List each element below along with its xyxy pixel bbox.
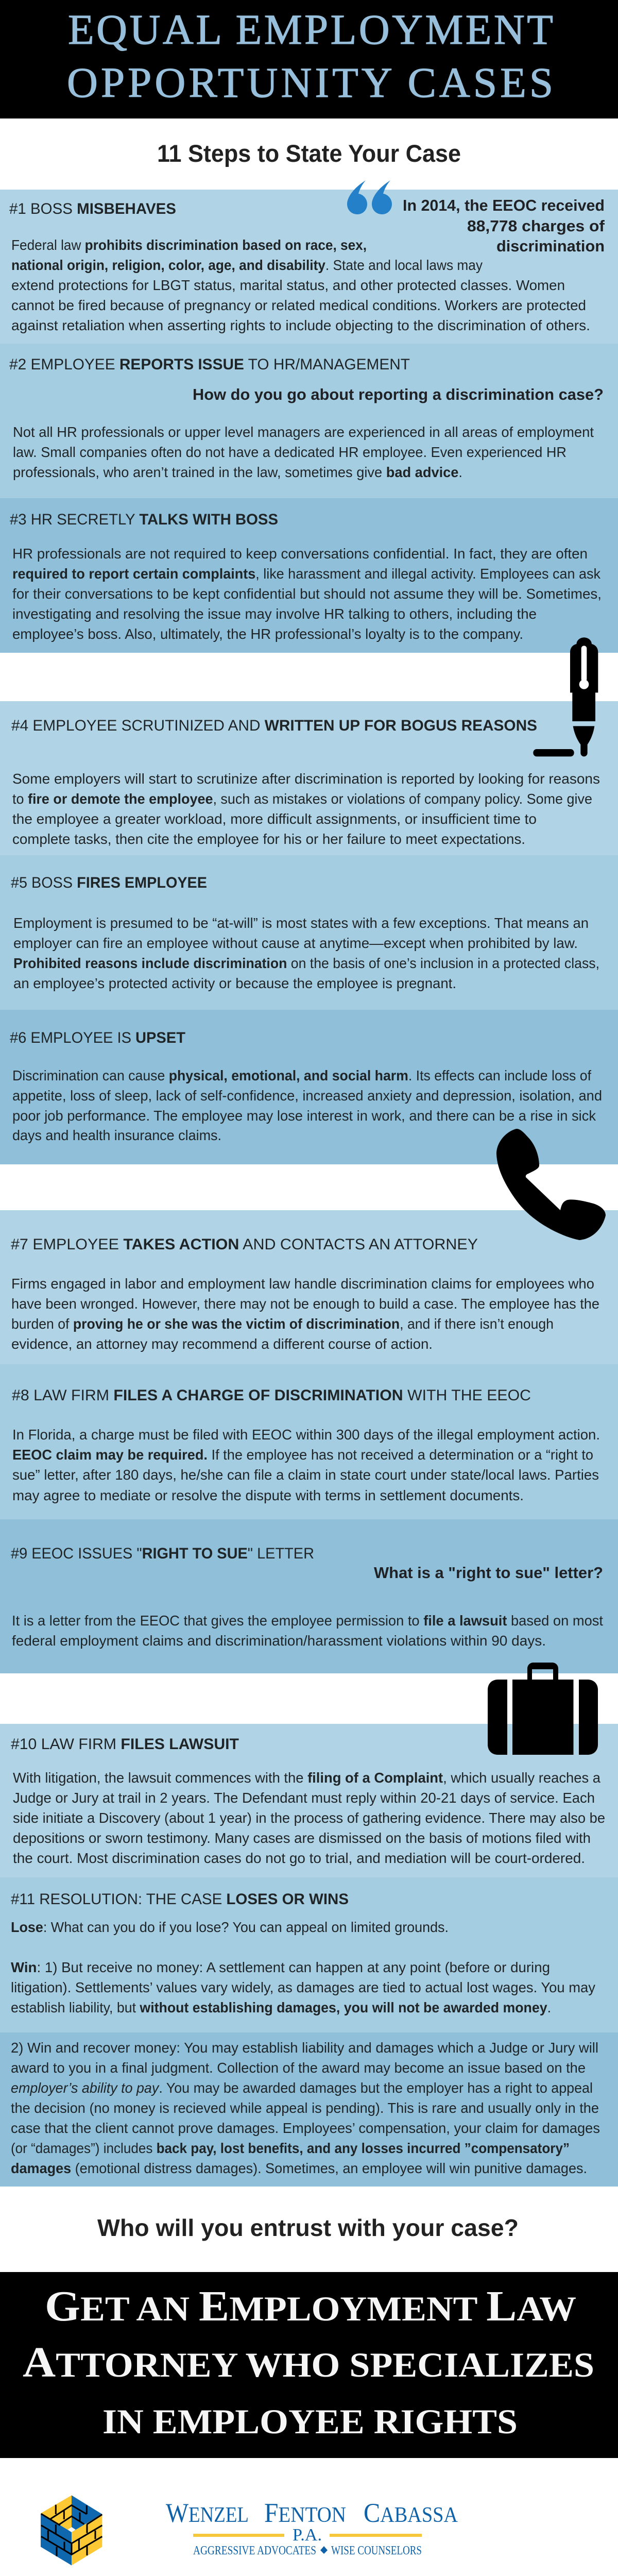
panel: step 7 employee takes action <box>0 1210 618 1364</box>
panel: step 9 right to sue letter <box>0 1519 618 1673</box>
text: step 2 body: law. Small companies often do not have a dedicated HR employee. Even experienced HR <box>13 444 566 460</box>
text: step 3 body: HR professionals are not required to keep conversations confidential. In fact, they are often <box>12 546 588 562</box>
panel: step 3 HR talks with boss <box>0 498 618 653</box>
text: step 8 body: sue” letter, after 180 days, he/she can file a claim in state court under state/local laws. Parties <box>12 1467 599 1483</box>
text: step 1 body <box>11 237 590 333</box>
text: step 4 body: Some employers will start to scrutinize after discrimination is reported by looking for reasons <box>12 771 600 787</box>
heading: step 9: #9 EEOC ISSUES "RIGHT TO SUE" LETTER <box>11 1545 314 1562</box>
logo: Wenzel Fenton Cabassa wordmark: AGGRESSIVE ADVOCATES <box>193 2544 316 2557</box>
text: step 7 body <box>11 1276 599 1352</box>
text: step 8 body <box>12 1427 600 1503</box>
text: step 6 body: poor job performance. The employee may lose interest in work, and there can be a rise in sick <box>12 1108 596 1124</box>
text: step 1 body: Federal law prohibits discrimination based on race, sex, <box>11 237 367 253</box>
title banner: OPPORTUNITY CASES <box>67 59 553 106</box>
panel: step 11 win and recover money <box>0 2032 618 2187</box>
text: step 10 body <box>13 1770 605 1866</box>
panel: step 8 law firm files a charge <box>0 1364 618 1519</box>
text: step 5 body: Employment is presumed to be “at-will” is most states with a few exceptions. That means an <box>13 915 589 931</box>
icon: telephone handset <box>496 1129 606 1240</box>
logo: Wenzel Fenton Cabassa wordmark: FENTON <box>264 2498 346 2528</box>
text: step 4 body: complete tasks, then cite the employee for his or her failure to meet expectations. <box>12 831 525 847</box>
text: step 3 body: for their conversations to be kept confidential but should not assume they will be. Sometimes, <box>12 586 602 602</box>
call to action banner: ATTORNEY WHO SPECIALIZES <box>23 2338 594 2386</box>
callout: EEOC charges statistic <box>403 196 605 255</box>
logo: Wenzel Fenton Cabassa wordmark: WENZEL <box>166 2498 249 2528</box>
icon: blue quotation mark <box>347 180 392 214</box>
text: step 1 body: cannot be fired because of pregnancy or related medical conditions. Workers are protected <box>11 297 586 313</box>
text: step 3 body: required to report certain complaints, like harassment and illegal activity. Employees can ask <box>12 566 601 582</box>
text: step 2 body: professionals, who aren’t trained in the law, sometimes give bad advice. <box>13 464 462 480</box>
text: win with no money <box>11 1959 595 2015</box>
text: step 9 body <box>12 1613 603 1649</box>
call to action banner: GET AN EMPLOYMENT LAW <box>45 2282 576 2330</box>
logo: Wenzel Fenton Cabassa wordmark: WISE COUNSELORS <box>331 2544 422 2557</box>
heading: step 1: #1 BOSS MISBEHAVES <box>9 200 176 217</box>
text: win with no money: Win: 1) But receive no money: A settlement can happen at any point (before or during <box>11 1959 550 1975</box>
text: step 7 body: have been wronged. However, there may not be enough to build a case. The employee has the <box>11 1296 599 1312</box>
heading: step 7: #7 EMPLOYEE TAKES ACTION AND CONTACTS AN ATTORNEY <box>11 1236 478 1253</box>
heading: step 8: #8 LAW FIRM FILES A CHARGE OF DISCRIMINATION WITH THE EEOC <box>12 1387 531 1404</box>
text: step 6 body: days and health insurance claims. <box>12 1127 221 1143</box>
panel: step 11 win and recover money: the decision (no money is recieved while appeal is pending). This is rare and usually only in the <box>11 2100 599 2116</box>
text: step 9 body: federal employment claims and discrimination/harassment violations within 90 days. <box>12 1633 546 1649</box>
panel: step 10 law firm files lawsuit <box>0 1724 618 1877</box>
logo: Wenzel Fenton Cabassa wordmark: P.A. <box>293 2526 322 2545</box>
text: step 4 body: the employee a greater workload, more difficult assignments, or insufficient time to <box>12 811 537 827</box>
text: step 10 body: With litigation, the lawsuit commences with the filing of a Complaint, which usually reaches a <box>13 1770 600 1786</box>
heading: step 3: #3 HR SECRETLY TALKS WITH BOSS <box>10 511 278 528</box>
text: win with no money: establish liability, but without establishing damages, you will not be awarded money. <box>11 1999 551 2015</box>
panel: step 5 boss fires employee <box>0 855 618 1010</box>
text: step 7 body: burden of proving he or she was the victim of discrimination, and if there isn’t enough <box>11 1316 554 1332</box>
text: step 5 body: Prohibited reasons include discrimination on the basis of one’s inclusion in a protected class, <box>13 955 599 971</box>
text: step 6 body: appetite, loss of sleep, lack of self-confidence, increased anxiety and depression, isolation, and <box>12 1088 602 1104</box>
text: step 5 body <box>13 915 599 991</box>
text: step 2 body: Not all HR professionals or upper level managers are experienced in all areas of employment <box>13 424 594 440</box>
text: step 10 body: the court. Most discrimination cases do not go to trial, and mediation will be court-ordered. <box>13 1850 585 1866</box>
text: step 3 body: investigating and resolving the issue may involve HR talking to others, including the <box>12 606 537 622</box>
panel: step 11 win and recover money: 2) Win and recover money: You may establish liability and damages which a Judge or Jury will <box>11 2040 598 2056</box>
panel: step 11 win and recover money: employer’s ability to pay. You may be awarded damages but the employer has a right to appeal <box>11 2080 593 2096</box>
text: step 9 body: It is a letter from the EEOC that gives the employee permission to file a lawsuit based on most <box>12 1613 603 1629</box>
text: step 3 body: employee’s boss. Also, ultimately, the HR professional’s loyalty is to the company. <box>12 626 523 642</box>
text: step 1 body: extend protections for LBGT status, marital status, and other protected classes. Women <box>11 277 565 293</box>
panel: step 11 win and recover money: damages (emotional distress damages). Sometimes, an employee will win punitive damages. <box>11 2160 587 2176</box>
panel: step 1 boss misbehaves <box>0 190 618 344</box>
title banner: EQUAL EMPLOYMENT <box>68 6 553 53</box>
text: step 10 body: side initiate a Discovery (about 1 year) in the process of gathering evidence. There may also be <box>13 1810 605 1826</box>
logo: Wenzel Fenton Cabassa wordmark: CABASSA <box>364 2498 458 2528</box>
heading: step 5: #5 BOSS FIRES EMPLOYEE <box>11 874 207 891</box>
text: step 4 body <box>12 771 600 847</box>
heading: step 4: #4 EMPLOYEE SCRUTINIZED AND WRITTEN UP FOR BOGUS REASONS <box>11 717 537 734</box>
text: step 3 body <box>12 546 602 642</box>
text: step 10 body: Judge or Jury at trail in 2 years. The Defendant must reply within 20-21 days of service. Each <box>13 1790 595 1806</box>
title banner <box>0 0 618 118</box>
heading: step 11: #11 RESOLUTION: THE CASE LOSES OR WINS <box>11 1891 349 1908</box>
heading: step 10: #10 LAW FIRM FILES LAWSUIT <box>11 1736 239 1753</box>
text: step 6 body <box>12 1067 602 1143</box>
text: step 1 body: national origin, religion, color, age, and disability. State and local laws may <box>11 257 483 273</box>
icon: fountain pen <box>533 637 598 756</box>
text: win with no money: litigation). Settlements’ values vary widely, as damages are tied to actual lost wages. You may <box>11 1979 595 1995</box>
logo: Wenzel Fenton Cabassa wordmark <box>166 2498 458 2557</box>
callout question: reporting: How do you go about reporting a discrimination case? <box>193 385 604 403</box>
text: step 8 body: may agree to mediate or resolve the dispute with terms in settlement documents. <box>12 1487 524 1503</box>
panel: step 4 employee scrutinized <box>0 701 618 855</box>
panel: step 11 win and recover money: award to you in a final judgment. Collection of the award may become an issue based on the <box>11 2060 586 2076</box>
text: step 2 body <box>13 424 594 480</box>
logo: brick cube <box>41 2495 102 2565</box>
text: step 1 body: against retaliation when asserting rights to include objecting to the discrimination of others. <box>11 317 590 333</box>
heading: step 6: #6 EMPLOYEE IS UPSET <box>10 1029 185 1046</box>
text: step 6 body: Discrimination can cause physical, emotional, and social harm. Its effects can include loss of <box>12 1067 591 1083</box>
callout: EEOC charges statistic: discrimination <box>496 237 605 255</box>
callout: EEOC charges statistic: 88,778 charges of <box>467 217 605 235</box>
closing question: Who will you entrust with your case? <box>97 2214 519 2241</box>
text: step 7 body: evidence, an attorney may recommend a different course of action. <box>11 1336 433 1352</box>
text: step 10 body: depositions or sworn testimony. Many cases are dismissed on the basis of motions filed with <box>13 1830 591 1846</box>
panel: step 11 win and recover money: (or “damages”) includes back pay, lost benefits, and any losses incurred ”compensatory” <box>11 2140 570 2156</box>
text: step 5 body: an employee’s protected activity or because the employee is pregnant. <box>13 975 456 991</box>
text: lose outcome: Lose: What can you do if you lose? You can appeal on limited grounds. <box>11 1919 449 1935</box>
call to action banner <box>0 2272 618 2458</box>
panel: step 11 resolution lose or win <box>0 1877 618 2032</box>
text: step 8 body: EEOC claim may be required. If the employee has not received a determination or a “right to <box>12 1447 593 1463</box>
text: step 7 body: Firms engaged in labor and employment law handle discrimination claims for employees who <box>11 1276 594 1292</box>
icon: briefcase <box>488 1663 598 1755</box>
panel: step 11 win and recover money: case that the client cannot prove damages. Employees’ compensation, your claim for damages <box>11 2120 600 2136</box>
text: step 4 body: to fire or demote the employee, such as mistakes or violations of company policy. Some give <box>12 791 592 807</box>
callout: EEOC charges statistic: In 2014, the EEOC received <box>403 196 605 214</box>
panel: step 2 employee reports issue <box>0 344 618 498</box>
heading: step 2: #2 EMPLOYEE REPORTS ISSUE TO HR/MANAGEMENT <box>9 356 410 373</box>
subtitle: 11 Steps to State Your Case <box>157 140 461 167</box>
text: step 8 body: In Florida, a charge must be filed with EEOC within 300 days of the illegal employment action. <box>12 1427 600 1443</box>
callout question: right to sue: What is a "right to sue" letter? <box>374 1564 603 1582</box>
call to action banner: IN EMPLOYEE RIGHTS <box>102 2402 518 2441</box>
text: step 5 body: employer can fire an employee without cause at anytime—except when prohibited by law. <box>13 935 578 951</box>
panel: step 6 employee is upset <box>0 1010 618 1164</box>
